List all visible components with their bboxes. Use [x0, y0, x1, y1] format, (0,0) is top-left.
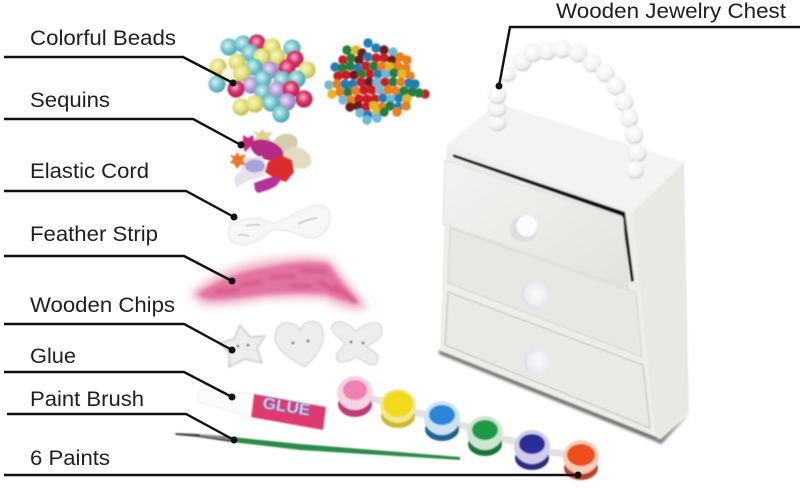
label: wooden chips: Wooden Chips	[30, 294, 175, 317]
label: elastic cord	[4, 160, 238, 220]
butterfly chip	[332, 322, 382, 365]
label: wooden jewelry chest	[496, 0, 800, 90]
chest front	[440, 145, 655, 436]
open top drawer	[443, 160, 628, 288]
label: wooden chips	[4, 294, 236, 354]
label: glue: Glue	[30, 345, 76, 368]
chest top	[447, 103, 684, 212]
label: sequins: Sequins	[30, 89, 110, 112]
paint strip	[337, 376, 599, 480]
star sequins	[253, 129, 273, 142]
wooden chips	[219, 321, 382, 367]
star chip	[219, 325, 265, 367]
blue pot	[424, 401, 460, 441]
drawer 3	[445, 292, 650, 428]
glue tube	[198, 389, 326, 430]
label: feather strip: Feather Strip	[30, 223, 158, 246]
pink pot	[337, 376, 373, 417]
knob 2	[522, 281, 548, 307]
label: elastic cord: Elastic Cord	[30, 160, 149, 183]
red sequin	[265, 155, 294, 182]
bead handle	[488, 40, 646, 179]
white flower sequins	[234, 156, 267, 188]
drawer 2	[448, 228, 642, 357]
label: glue	[4, 345, 236, 400]
label: colorful beads	[4, 27, 236, 86]
label: sequins	[4, 89, 244, 148]
glue label: GLUE	[261, 395, 312, 420]
elastic cord	[228, 205, 330, 245]
label: wooden jewelry chest: Wooden Jewelry Chest	[556, 0, 786, 23]
jewelry chest	[439, 40, 690, 444]
label: paint brush	[7, 388, 238, 444]
small glass beads	[324, 38, 430, 125]
magenta sequin	[248, 135, 286, 165]
knob 3	[524, 348, 550, 374]
label: colorful beads: Colorful Beads	[30, 27, 176, 50]
yellow pot	[380, 389, 416, 428]
colorful beads	[208, 34, 316, 123]
label: 6 paints: 6 Paints	[30, 447, 110, 470]
knob 1	[510, 216, 538, 242]
orange flower	[230, 152, 246, 169]
drawer opening gap	[453, 154, 634, 282]
strip connectors	[370, 398, 566, 454]
label: feather strip	[4, 223, 236, 284]
magenta fish	[254, 176, 281, 193]
chest shadow	[439, 350, 690, 444]
top front edge	[447, 145, 633, 217]
heart chip	[275, 321, 323, 367]
purple pot	[514, 430, 550, 470]
paint brush	[175, 433, 460, 460]
feather strip	[190, 256, 368, 310]
sequins	[230, 129, 315, 193]
green pot	[467, 416, 503, 456]
chest right side	[633, 162, 689, 438]
beige sequins	[269, 130, 301, 158]
orange pot	[563, 440, 599, 480]
label: paint brush: Paint Brush	[30, 388, 144, 411]
label: 6 paints	[4, 447, 582, 478]
feather barbs	[215, 270, 356, 303]
